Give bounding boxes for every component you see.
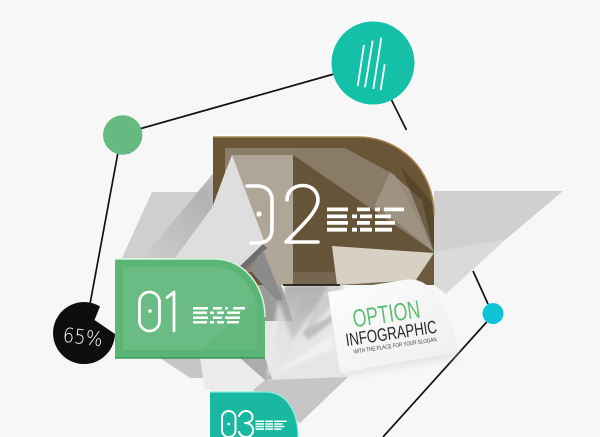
black percent badge — [53, 302, 115, 364]
connector lines — [90, 74, 488, 437]
panel 01: green — [115, 259, 265, 358]
panel 02: brown — [175, 134, 434, 300]
card text: INFOGRAPHIC — [344, 317, 438, 350]
text lines placeholder — [327, 208, 404, 232]
cyan node — [482, 303, 504, 324]
number 02 — [247, 186, 318, 243]
green node — [103, 115, 142, 155]
label 65%: 65% — [62, 323, 104, 351]
text lines placeholder — [256, 420, 286, 430]
text lines placeholder — [193, 307, 245, 324]
card text: OPTION — [351, 296, 422, 333]
teal circle with bars icon — [332, 22, 414, 104]
number 01 — [140, 292, 174, 331]
card text: WITH THE PLACE FOR YOUR SLOGAN — [353, 337, 437, 356]
light triangle over panel — [175, 155, 265, 290]
number 03 — [222, 411, 253, 437]
card text — [341, 293, 439, 357]
panel 03: teal — [210, 392, 298, 437]
white option card — [328, 279, 459, 373]
card shadow — [340, 342, 460, 376]
geometric grey background shapes — [122, 158, 563, 423]
